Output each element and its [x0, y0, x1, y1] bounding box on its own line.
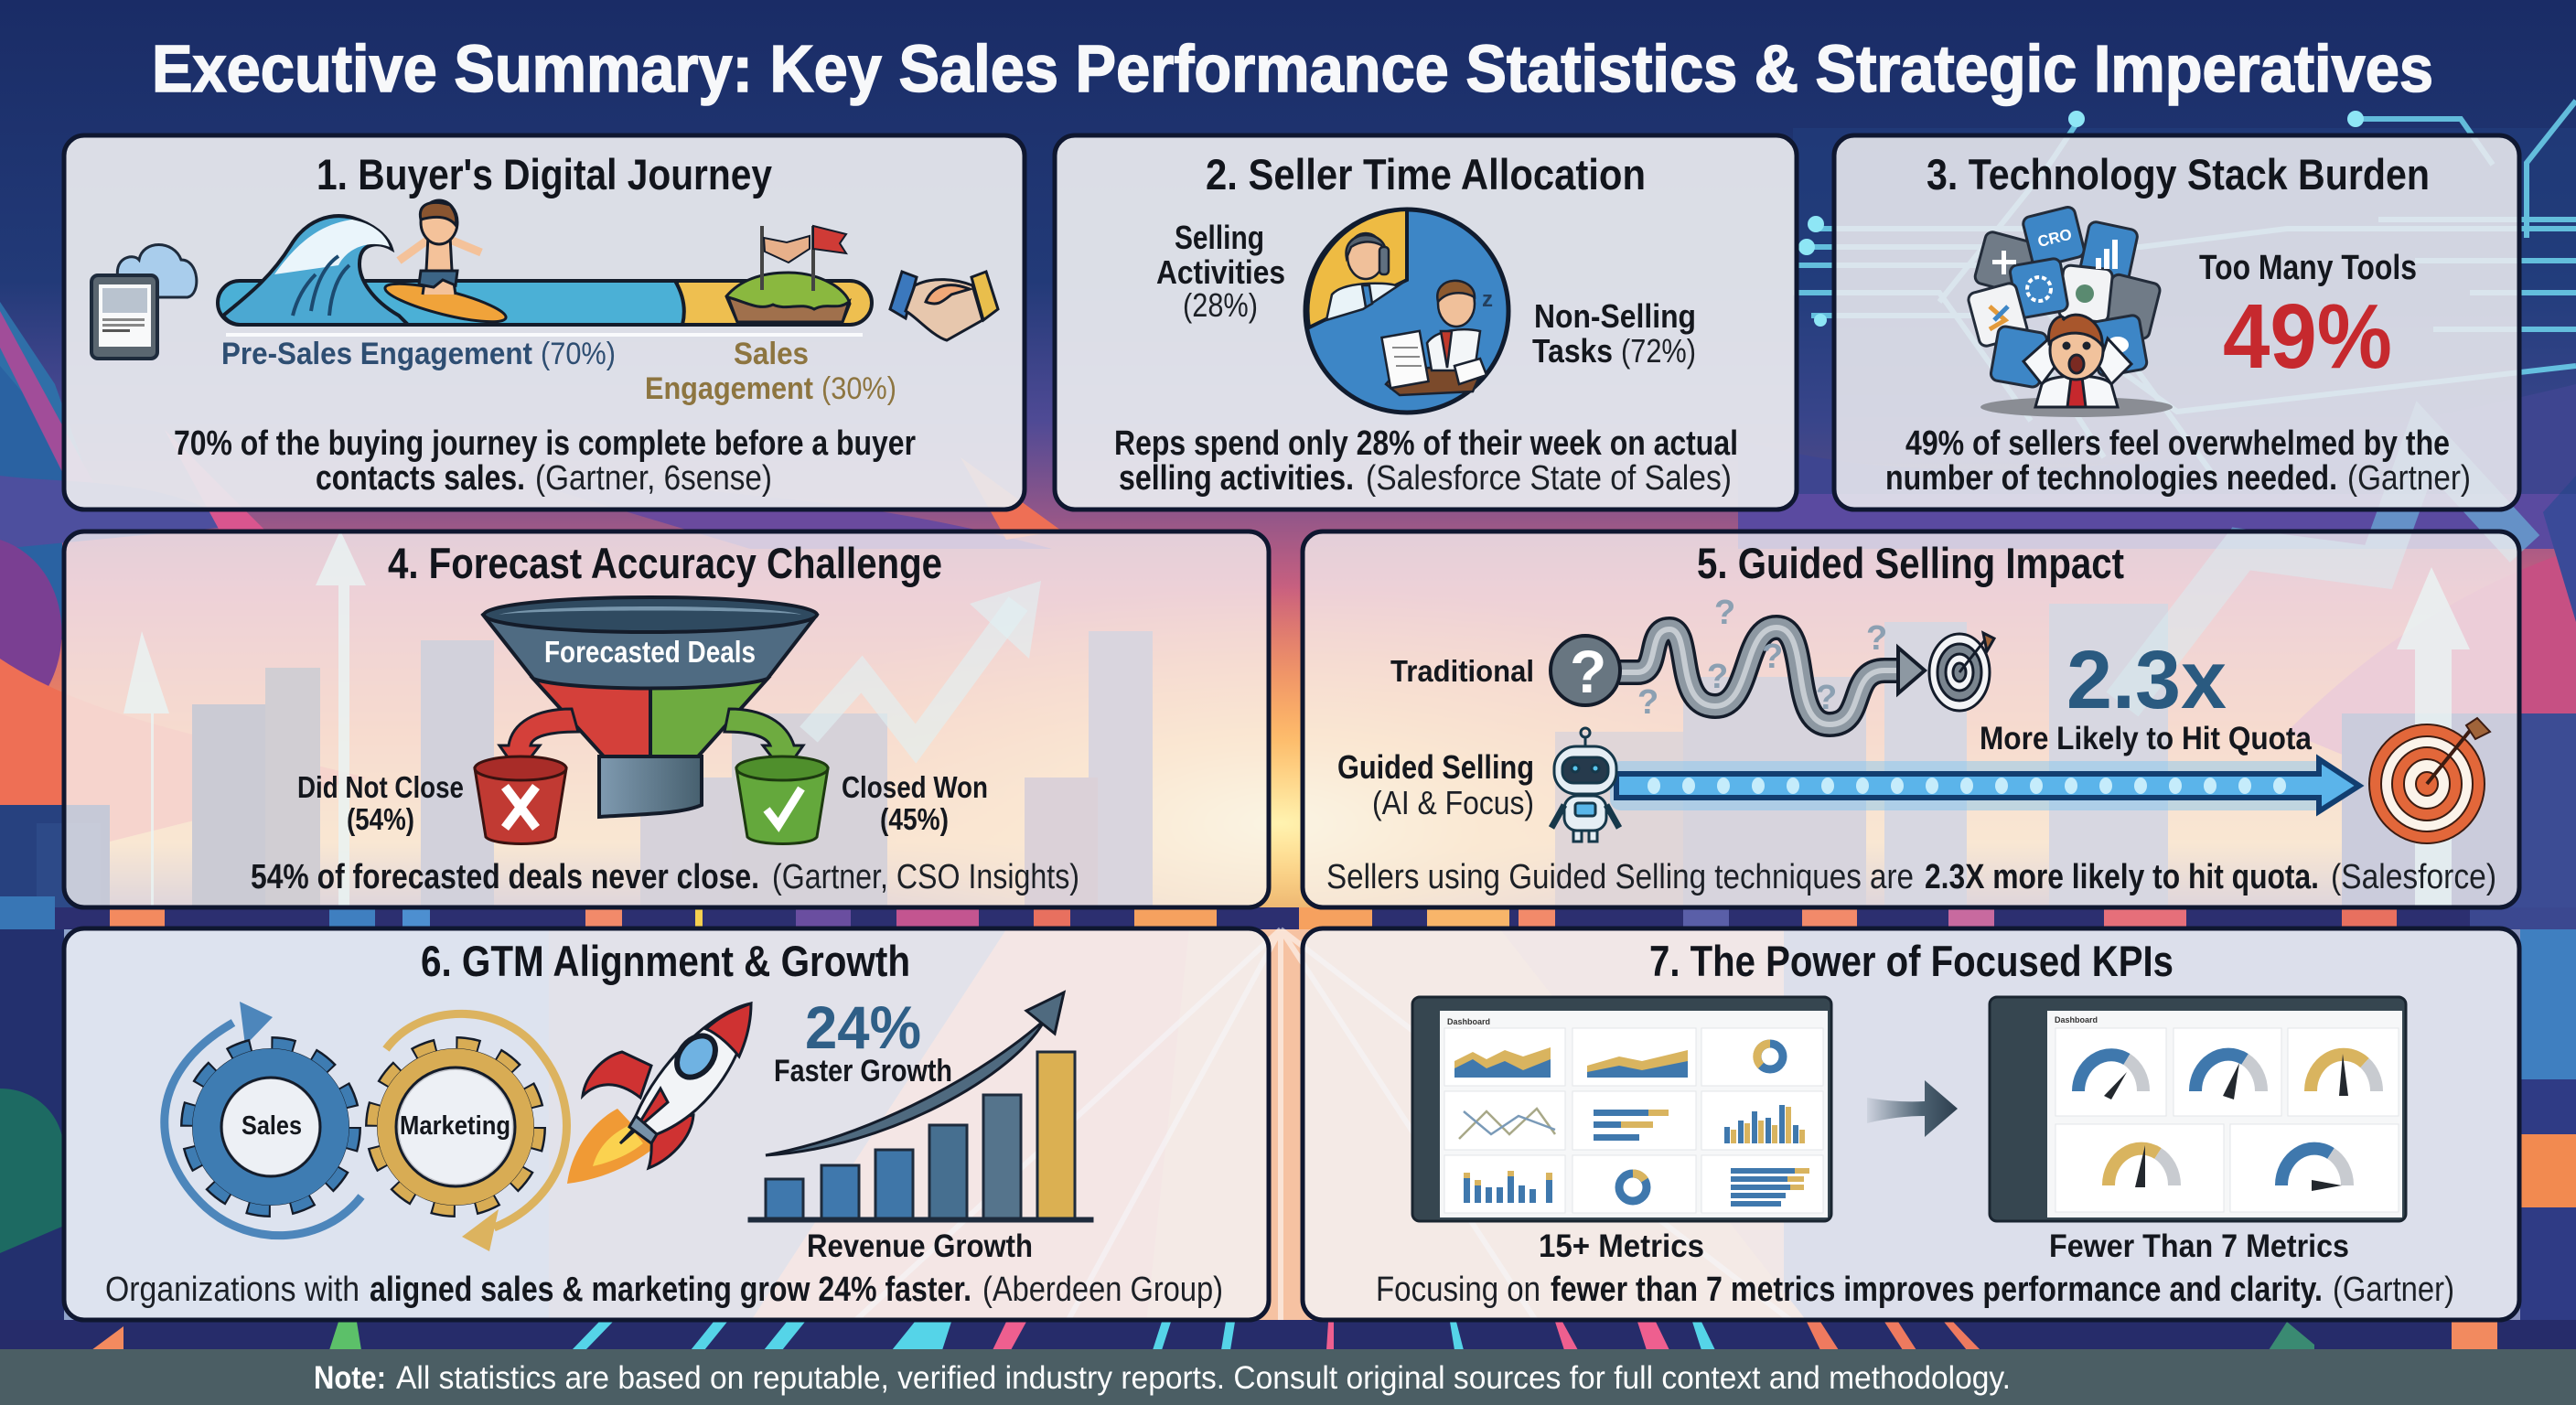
icon: green bucket with check: [736, 756, 828, 843]
label: non-selling tasks: Non-Selling: [1534, 297, 1696, 335]
icon: marketing gear: [375, 1046, 536, 1207]
label: 15+ metrics: 15+ Metrics: [1539, 1228, 1704, 1264]
dashboard: 15+ metrics: Dashboard: [1447, 1017, 1490, 1026]
statistic text: [105, 1271, 1223, 1309]
heading: 3. Technology Stack Burden: [1927, 150, 2430, 198]
footer note: Note:: [314, 1360, 386, 1396]
label: selling activities: [1156, 219, 1285, 324]
label: sales engagement: [645, 337, 896, 406]
statistic text: contacts sales.: [316, 459, 525, 498]
statistic text: fewer than 7 metrics improves performance and clarity.: [1551, 1271, 2323, 1309]
panel 6: GTM Alignment & Growth: [64, 928, 1269, 1320]
heading: 4. Forecast Accuracy Challenge: [388, 539, 942, 587]
label: did not close: Did Not Close: [297, 770, 464, 804]
panel 5: Guided Selling Impact: [1303, 531, 2519, 907]
skyline: [0, 604, 2576, 951]
label: fewer than 7 metrics: Fewer Than 7 Metrics: [2049, 1228, 2349, 1264]
big number: 2.3x: 2.3x: [2066, 635, 2227, 726]
heading: 2. Seller Time Allocation: [1206, 150, 1646, 198]
arrow: growth curve: [766, 992, 1064, 1155]
label: selling activities: Selling: [1175, 219, 1264, 256]
heading: 6. GTM Alignment & Growth: [421, 937, 910, 985]
dashboard: fewer than 7 metrics: Dashboard: [2055, 1015, 2098, 1024]
dashboard: 15+ metrics: [1412, 997, 1831, 1221]
label: sales engagement: (30%): [821, 371, 896, 406]
progress bar: pre-sales 70%, sales 30%: [218, 281, 872, 337]
statistic text: Organizations with: [105, 1271, 360, 1309]
label: non-selling tasks: (72%): [1621, 332, 1696, 370]
gear label: marketing: Marketing: [400, 1111, 510, 1141]
statistic text: (Salesforce State of Sales): [1366, 459, 1732, 498]
illustration: overwhelmed seller under app tiles: CRO: [2036, 225, 2074, 251]
gear label: sales: Sales: [242, 1111, 302, 1141]
statistic text: (Gartner, CSO Insights): [772, 858, 1079, 896]
footer note: All statistics are based on reputable, verified industry reports. Consult original sources for full context and methodology.: [396, 1360, 2011, 1396]
panel 1: Buyer's Digital Journey: [64, 135, 1025, 509]
traditional winding path: ?: [1570, 638, 1606, 705]
bar chart: revenue growth: [749, 1052, 1092, 1221]
label: more likely: More Likely to Hit Quota: [1980, 721, 2312, 756]
statistic text: [174, 424, 916, 498]
statistic text: (Gartner): [2333, 1271, 2454, 1309]
label: sales engagement: Engagement: [645, 371, 813, 406]
guided selling arrow: [1610, 759, 2359, 811]
statistic text: aligned sales & marketing grow 24% faster.: [370, 1271, 971, 1309]
traditional winding path: ?: [1637, 683, 1658, 722]
label: selling activities: (28%): [1183, 286, 1258, 324]
arrow: gold cycle: [386, 1014, 566, 1251]
statistic text: 49% of sellers feel overwhelmed by the: [1905, 424, 2450, 463]
label: too many tools: Too Many Tools: [2199, 249, 2417, 287]
lower scene: [0, 929, 2576, 1350]
icon: sales gear: [190, 1046, 351, 1207]
traditional winding path: ?: [1866, 619, 1887, 658]
arrow: blue cycle: [165, 1002, 361, 1236]
statistic text: (Gartner, 6sense): [535, 459, 772, 498]
building strip between rows: [0, 896, 2576, 929]
label: non-selling tasks: [1532, 297, 1696, 370]
icon: tablet and cloud: [91, 245, 197, 359]
panel 4: Forecast Accuracy Challenge: [64, 531, 1269, 907]
label: closed won: Closed Won: [842, 770, 988, 804]
label: did not close: [297, 770, 464, 836]
heading: 1. Buyer's Digital Journey: [317, 150, 772, 198]
icon: grey target: [1929, 633, 1994, 711]
label: guided selling: Guided Selling: [1337, 748, 1534, 786]
label: sales engagement: Sales: [734, 337, 809, 371]
icon: robot: [1551, 728, 1619, 842]
statistic text: 54% of forecasted deals never close.: [251, 858, 759, 896]
icon: rocket: [567, 1003, 751, 1184]
label: pre-sales engagement: (70%): [541, 337, 616, 371]
panel 3: Technology Stack Burden: [1834, 135, 2519, 509]
big number: 24%: 24%: [805, 993, 921, 1061]
statistic text: Sellers using Guided Selling techniques are: [1326, 858, 1914, 896]
statistic text: selling activities.: [1119, 459, 1354, 498]
title: Executive Summary: Key Sales Performance Statistics & Strategic Imperatives: [152, 33, 2433, 106]
icon: orange target: [2369, 718, 2490, 843]
illustration: wave: [223, 216, 408, 325]
statistic text: (Gartner): [2347, 459, 2471, 498]
traditional winding path: [1551, 594, 1925, 724]
statistic text: 2.3X more likely to hit quota.: [1925, 858, 2319, 896]
icon: red bucket with cross: [475, 756, 566, 843]
footer note: [0, 1349, 2576, 1405]
statistic text: Focusing on: [1376, 1271, 1540, 1309]
pie chart: 28% selling, 72% non-selling: [1305, 209, 1508, 413]
figure: rep doing paperwork: [1381, 281, 1487, 395]
statistic text: (Salesforce): [2331, 858, 2496, 896]
traditional winding path: ?: [1816, 679, 1837, 717]
heading: 7. The Power of Focused KPIs: [1649, 937, 2174, 985]
label: faster growth: Faster Growth: [774, 1054, 952, 1089]
statistic text: (Aberdeen Group): [982, 1271, 1223, 1309]
panel 2: Seller Time Allocation: [1055, 135, 1797, 509]
label: pre-sales engagement: Pre-Sales Engagement: [221, 337, 532, 371]
label: non-selling tasks: Tasks: [1532, 332, 1613, 370]
label: closed won: [842, 770, 988, 836]
panel 7: The Power of Focused KPIs: [1303, 928, 2519, 1320]
label: guided selling: [1337, 748, 1534, 821]
funnel label: Forecasted Deals: [544, 635, 756, 669]
illustration: island with flags and handshake: [726, 226, 850, 322]
traditional winding path: ?: [1707, 658, 1728, 696]
arrow: to red bucket: [499, 709, 578, 773]
statistic text: [1114, 424, 1738, 498]
label: revenue growth: Revenue Growth: [807, 1228, 1033, 1264]
funnel chart: [475, 597, 828, 843]
figure: rep on the phone: [1326, 233, 1404, 320]
label: selling activities: Activities: [1156, 253, 1285, 291]
arrow: to green bucket: [724, 709, 803, 773]
label: traditional: Traditional: [1390, 654, 1534, 688]
illustration: surfer: [382, 200, 509, 329]
label: closed won: (45%): [880, 802, 949, 836]
statistic text: 70% of the buying journey is complete before a buyer: [174, 424, 916, 463]
arrow: to focused dashboard: [1867, 1080, 1958, 1137]
pie chart: 28% selling, 72% non-selling: z: [1482, 287, 1493, 312]
statistic text: number of technologies needed.: [1885, 459, 2337, 498]
heading: 5. Guided Selling Impact: [1697, 539, 2124, 587]
dashboard: fewer than 7 metrics: [1990, 997, 2406, 1221]
statistic text: Reps spend only 28% of their week on actual: [1114, 424, 1738, 463]
traditional winding path: ?: [1714, 594, 1735, 632]
label: did not close: (54%): [347, 802, 414, 836]
icon: handshake: [890, 272, 998, 340]
traditional winding path: ?: [1762, 638, 1783, 676]
big number: 49%: 49%: [2223, 285, 2392, 388]
illustration: overwhelmed seller under app tiles: [1967, 206, 2173, 417]
statistic text: [1885, 424, 2471, 498]
statistic text: [1326, 858, 2496, 896]
label: guided selling: (AI & Focus): [1372, 784, 1534, 821]
